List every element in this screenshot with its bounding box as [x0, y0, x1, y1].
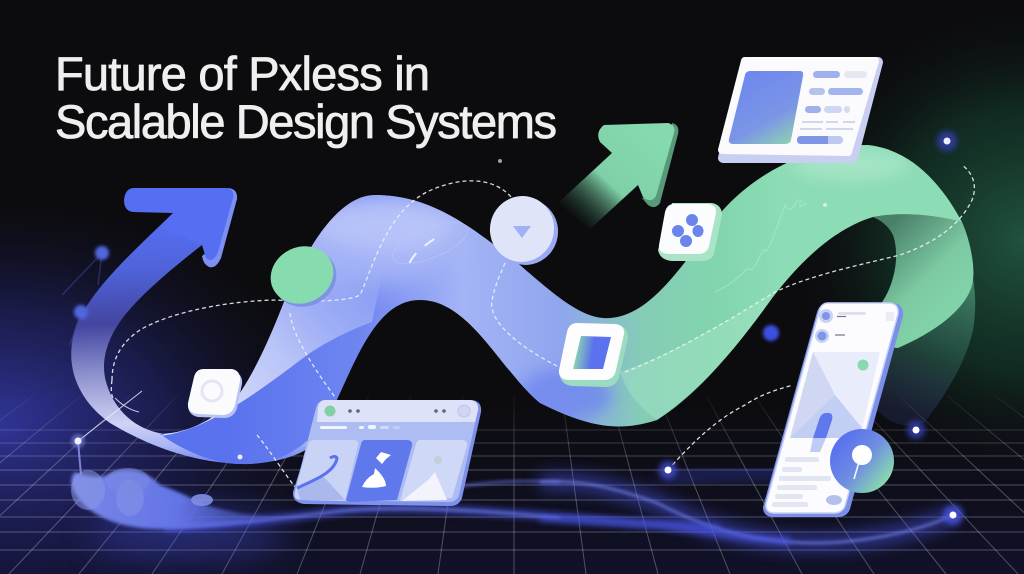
- arrow head face: [124, 188, 233, 260]
- cloud blob: [71, 468, 300, 529]
- arrow face: [558, 123, 674, 229]
- tile face: [559, 323, 624, 380]
- blue node lower left: [74, 305, 88, 319]
- mobile phone mockup: [763, 303, 903, 517]
- small sparkle on ribbon: [823, 203, 827, 207]
- node top right: [937, 131, 957, 151]
- blue node upper left: [95, 246, 109, 260]
- outer translucent sheet: [870, 240, 975, 426]
- glowing nodes: [71, 131, 963, 525]
- thin arc and node line at left: [78, 391, 142, 475]
- blue arrow and left ribbon swoosh: [71, 188, 310, 464]
- title: Scalable Design Systems: [55, 95, 557, 148]
- tile depth: [560, 323, 628, 387]
- arrow head side depth: [202, 188, 237, 267]
- phone face: [766, 303, 898, 513]
- glowing floor wave lines: [90, 472, 953, 557]
- tile face: [659, 204, 716, 254]
- tile depth: [188, 370, 242, 418]
- title: [55, 47, 557, 148]
- blue node center right: [763, 325, 779, 341]
- card face: [722, 61, 875, 152]
- right translucent ribbon fold: [860, 214, 975, 426]
- faint lines from blue nodes: [62, 253, 102, 345]
- circle node with triangle: [483, 189, 565, 272]
- pale trough sheen: [620, 293, 773, 420]
- card depth: [723, 62, 878, 158]
- text lines: [772, 457, 842, 507]
- tile face: [188, 369, 240, 415]
- perspective grid floor: [0, 395, 1024, 574]
- node left: [71, 434, 85, 448]
- pin stem: [854, 462, 859, 479]
- green highlight on crest: [790, 149, 910, 181]
- text bars: [797, 71, 867, 144]
- light upper fold: [162, 226, 379, 436]
- swirl marks on crest: [387, 214, 473, 272]
- hero image: [729, 71, 803, 144]
- dashed connector paths: [111, 165, 974, 487]
- square tile with gradient window: [559, 323, 628, 387]
- card one: [295, 440, 358, 501]
- map image area: [790, 352, 880, 452]
- swoosh and arrow shaft: [71, 213, 310, 464]
- pin head: [852, 445, 872, 465]
- small tile with ring: [188, 369, 242, 418]
- header avatars: [815, 309, 894, 343]
- status icons: [324, 405, 470, 417]
- node on blue ribbon: [238, 454, 242, 460]
- nav pills: [320, 425, 400, 429]
- node lower right: [943, 505, 963, 525]
- top right dashboard card: [722, 61, 878, 158]
- browser window tablet: [293, 400, 481, 506]
- crest body light: [275, 195, 455, 285]
- ring: [202, 381, 222, 401]
- tablet face: [295, 400, 478, 502]
- phone depth: [763, 303, 903, 517]
- title bar: [317, 400, 478, 422]
- green arrow: [558, 123, 678, 229]
- card three: [400, 440, 467, 501]
- main wave ribbon: [160, 145, 962, 464]
- node right: [907, 421, 925, 439]
- node on floor: [659, 461, 677, 479]
- dots: [672, 214, 704, 247]
- card two: [346, 440, 412, 502]
- crest highlight: [315, 201, 455, 249]
- small grey node: [498, 159, 502, 163]
- app icon tile with four dots: [658, 203, 722, 261]
- tile depth: [658, 203, 722, 261]
- green ellipse node: [261, 236, 346, 317]
- blue shadow in trough: [517, 369, 613, 421]
- arrow side depth: [642, 123, 678, 207]
- inner translucent sheet: [860, 214, 973, 348]
- tablet depth: [293, 400, 481, 506]
- title: Future of Pxless in: [55, 47, 430, 100]
- triangle glyph: [513, 226, 531, 238]
- location pin badge: [830, 429, 894, 493]
- window: [573, 336, 611, 369]
- faint chart squiggle on ribbon: [715, 199, 806, 292]
